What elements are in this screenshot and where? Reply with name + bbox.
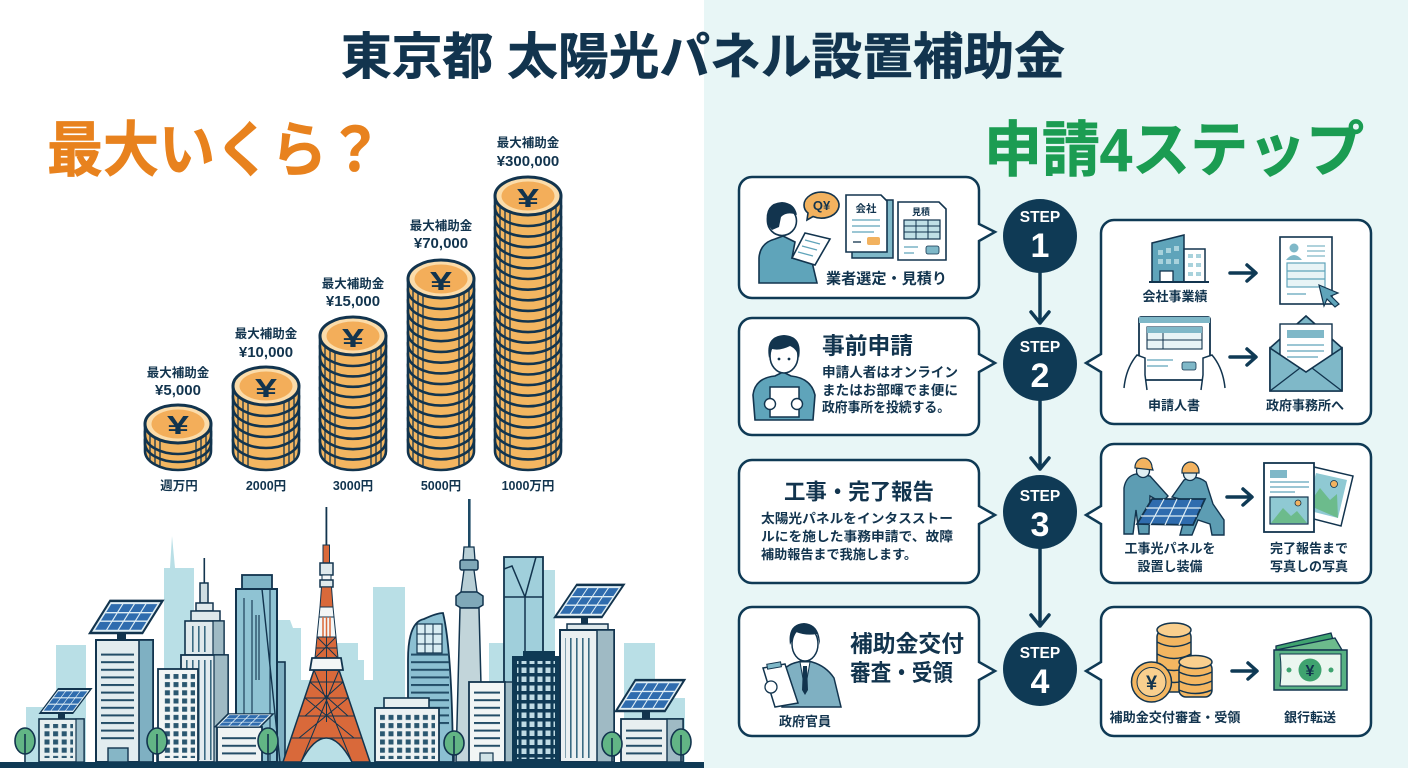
trees	[15, 728, 691, 762]
arrow	[1227, 489, 1252, 505]
coin stack 3	[320, 276, 386, 493]
coin stack 2: ¥10,000	[239, 344, 293, 361]
description: ルにを施した事務申請で、故障	[761, 529, 953, 544]
coin stack 1: 最大補助金	[147, 365, 210, 380]
label: 補助金交付審査・受領	[1110, 710, 1240, 725]
coin stack 4: ¥	[430, 266, 453, 296]
panel: step 4 left card	[739, 607, 995, 736]
glass tower	[236, 575, 285, 762]
icon: tablet with hands	[1124, 317, 1225, 390]
step 4 badge: STEP	[1020, 645, 1060, 662]
description: 補助報告まで我施します。	[761, 547, 917, 562]
step 1 badge: 1	[1031, 227, 1049, 265]
icon: workers installing panel	[1124, 458, 1224, 535]
icon: company document: 会社	[856, 202, 877, 215]
coin stack 5: 1000万円	[502, 479, 554, 493]
coin stack 2: ¥	[255, 373, 278, 403]
coin stack 4: 5000円	[421, 479, 461, 493]
panel: step 1 left card	[739, 177, 995, 298]
icon: envelope with letter	[1270, 316, 1342, 391]
coin stack 4	[408, 218, 474, 493]
icon: coin stacks with yen coin: ¥	[1146, 672, 1158, 694]
panel: step 3 right card	[1086, 444, 1371, 583]
label: 写真しの写真	[1270, 559, 1348, 574]
description: 申請人者はオンライン	[822, 364, 958, 380]
timeline connector arrows	[1031, 270, 1049, 626]
heading: grant review and receipt: 審査・受領	[850, 660, 953, 686]
coin stack 4: 最大補助金	[410, 218, 473, 233]
description: またはお部暉でま便に	[822, 383, 958, 398]
description	[822, 364, 958, 415]
icon: coin stacks with yen coin	[1132, 623, 1212, 702]
step 1 badge: STEP	[1020, 209, 1060, 226]
panel: step 2 right card	[1086, 220, 1371, 424]
coin stack 1	[145, 365, 211, 493]
icon: Q yen speech bubble	[804, 192, 839, 220]
icon: applicant with paper	[753, 335, 815, 420]
icon: banknotes: ¥	[1306, 663, 1315, 680]
coin stack 5: 最大補助金	[497, 135, 560, 150]
icon: company buildings	[1149, 235, 1209, 282]
coin stack 5	[495, 135, 561, 493]
heading: grant review and receipt: 補助金交付	[850, 630, 964, 656]
coin stack 2	[233, 326, 299, 493]
icon: government official with clipboard	[763, 623, 841, 707]
icon: estimate document	[898, 202, 946, 260]
striped solar tower	[555, 585, 624, 762]
lined white building	[469, 682, 513, 762]
step 3 badge: 3	[1031, 506, 1049, 544]
label: 会社事業績	[1142, 289, 1208, 304]
description: 政府事所を投続する。	[822, 399, 950, 415]
step 1 badge	[1003, 199, 1077, 273]
arrow	[1230, 265, 1256, 281]
description	[761, 511, 953, 562]
mid-rise building	[375, 698, 439, 762]
coin stack 5: ¥	[517, 183, 540, 213]
panel: step 4 right card	[1086, 607, 1371, 736]
label: 完了報告まで	[1270, 541, 1348, 556]
stepped tower	[181, 558, 228, 762]
label: 設置し装備	[1137, 559, 1203, 574]
label: 工事光パネルを	[1124, 541, 1216, 556]
step 2 badge: STEP	[1020, 339, 1060, 356]
step 2 badge: 2	[1031, 357, 1049, 395]
label: 銀行転送	[1284, 710, 1336, 725]
title: 東京都 太陽光パネル設置補助金	[341, 29, 1065, 85]
panel: step 3 left card	[739, 460, 995, 583]
Skytree	[456, 499, 483, 762]
coin stack 5: ¥300,000	[497, 153, 559, 170]
step 4 badge: 4	[1031, 663, 1050, 701]
coin stack 1: ¥5,000	[155, 382, 201, 399]
coin stack 1: 週万円	[160, 478, 198, 493]
dark building	[512, 651, 560, 762]
illustration: Tokyo skyline	[0, 499, 704, 768]
coin stack 3: ¥	[342, 323, 365, 353]
icon: banknotes	[1274, 633, 1347, 690]
window building	[158, 669, 198, 762]
description: 太陽光パネルをインタスストー	[761, 511, 953, 526]
coin stack 1: ¥	[167, 410, 190, 440]
crown glass tower	[504, 557, 543, 762]
arrow	[1230, 349, 1256, 365]
coin stack 3: 3000円	[333, 479, 373, 493]
coin stack 3: 最大補助金	[322, 276, 385, 291]
chart: coin stacks by subsidy amount	[145, 135, 561, 493]
icon: Q yen speech bubble: Q¥	[813, 198, 831, 213]
label: 政府官員	[779, 714, 831, 729]
coin stack 2: 最大補助金	[235, 326, 298, 341]
solar building A	[39, 689, 91, 762]
background: left half	[0, 0, 704, 768]
heading: grant review and receipt	[850, 630, 964, 686]
panel: step 2 left card	[739, 318, 995, 435]
curved glass tower	[408, 613, 453, 762]
low solar building	[215, 714, 273, 762]
icon: person reading estimate	[759, 202, 830, 283]
arrow	[1232, 663, 1257, 679]
icon: report and photos	[1264, 463, 1353, 532]
coin stack 3: ¥15,000	[326, 293, 380, 310]
step 2 badge	[1003, 327, 1077, 401]
icon: company document	[846, 195, 893, 258]
step 3 badge	[1003, 475, 1077, 549]
coin stack 2: 2000円	[246, 479, 286, 493]
icon: application form with cursor	[1280, 237, 1339, 307]
background: right half	[704, 0, 1408, 768]
icon: estimate document: 見積	[912, 206, 930, 217]
solar building B	[90, 601, 163, 762]
Tokyo Tower	[283, 507, 370, 762]
label: 申請人書	[1148, 398, 1200, 413]
label	[1124, 541, 1216, 574]
step 3 badge: STEP	[1020, 488, 1060, 505]
heading: maximum amount: 最大いくら？	[47, 117, 383, 184]
heading: pre-application: 事前申請	[822, 332, 913, 358]
right solar building	[616, 680, 684, 762]
hazy background buildings	[26, 536, 685, 762]
ground line	[0, 762, 704, 768]
coin stack 4: ¥70,000	[414, 235, 468, 252]
step 4 badge	[1003, 632, 1077, 706]
label	[1270, 541, 1348, 574]
label: 業者選定・見積り	[826, 270, 947, 288]
heading: four steps: 申請4ステップ	[984, 117, 1364, 184]
label: 政府事務所へ	[1266, 398, 1344, 413]
heading: construction and completion report: 工事・完了報告	[784, 480, 934, 504]
